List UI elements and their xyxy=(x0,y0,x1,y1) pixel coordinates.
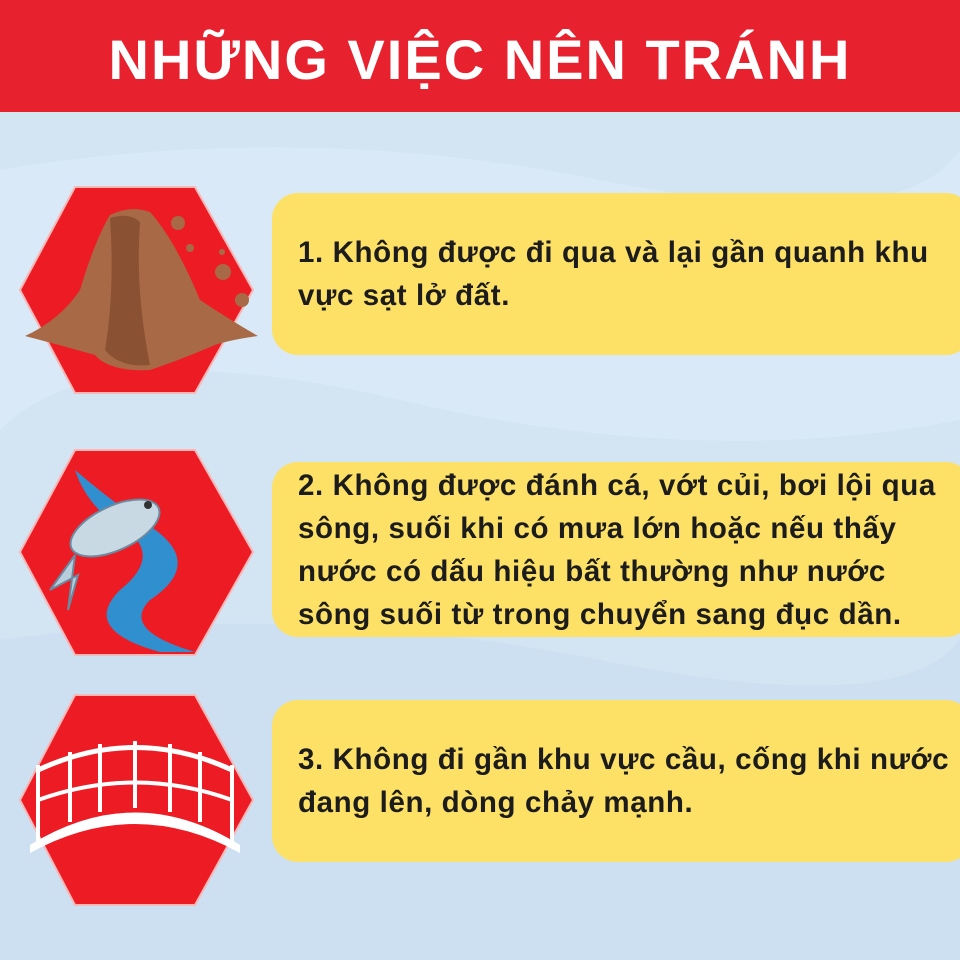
text box 1: 1. Không được đi qua và lại gần quanh khu xyxy=(298,236,929,269)
text box 3: 3. Không đi gần khu vực cầu, cống khi nước xyxy=(298,743,949,776)
text box 3: đang lên, dòng chảy mạnh. xyxy=(298,786,693,819)
title: NHỮNG VIỆC NÊN TRÁNH xyxy=(109,28,851,91)
text box 3 xyxy=(272,700,960,862)
text box 2: nước có dấu hiệu bất thường như nước xyxy=(298,554,886,588)
text box 1 xyxy=(272,193,960,355)
text box 2: sông suối từ trong chuyển sang đục dần. xyxy=(298,598,902,630)
text box 2 xyxy=(272,462,960,637)
text box 1: vực sạt lở đất. xyxy=(298,279,510,312)
text box 2: 2. Không được đánh cá, vớt củi, bơi lội qua xyxy=(298,468,936,502)
title xyxy=(0,0,960,112)
text box 2: sông, suối khi có mưa lớn hoặc nếu thấy xyxy=(298,512,896,544)
